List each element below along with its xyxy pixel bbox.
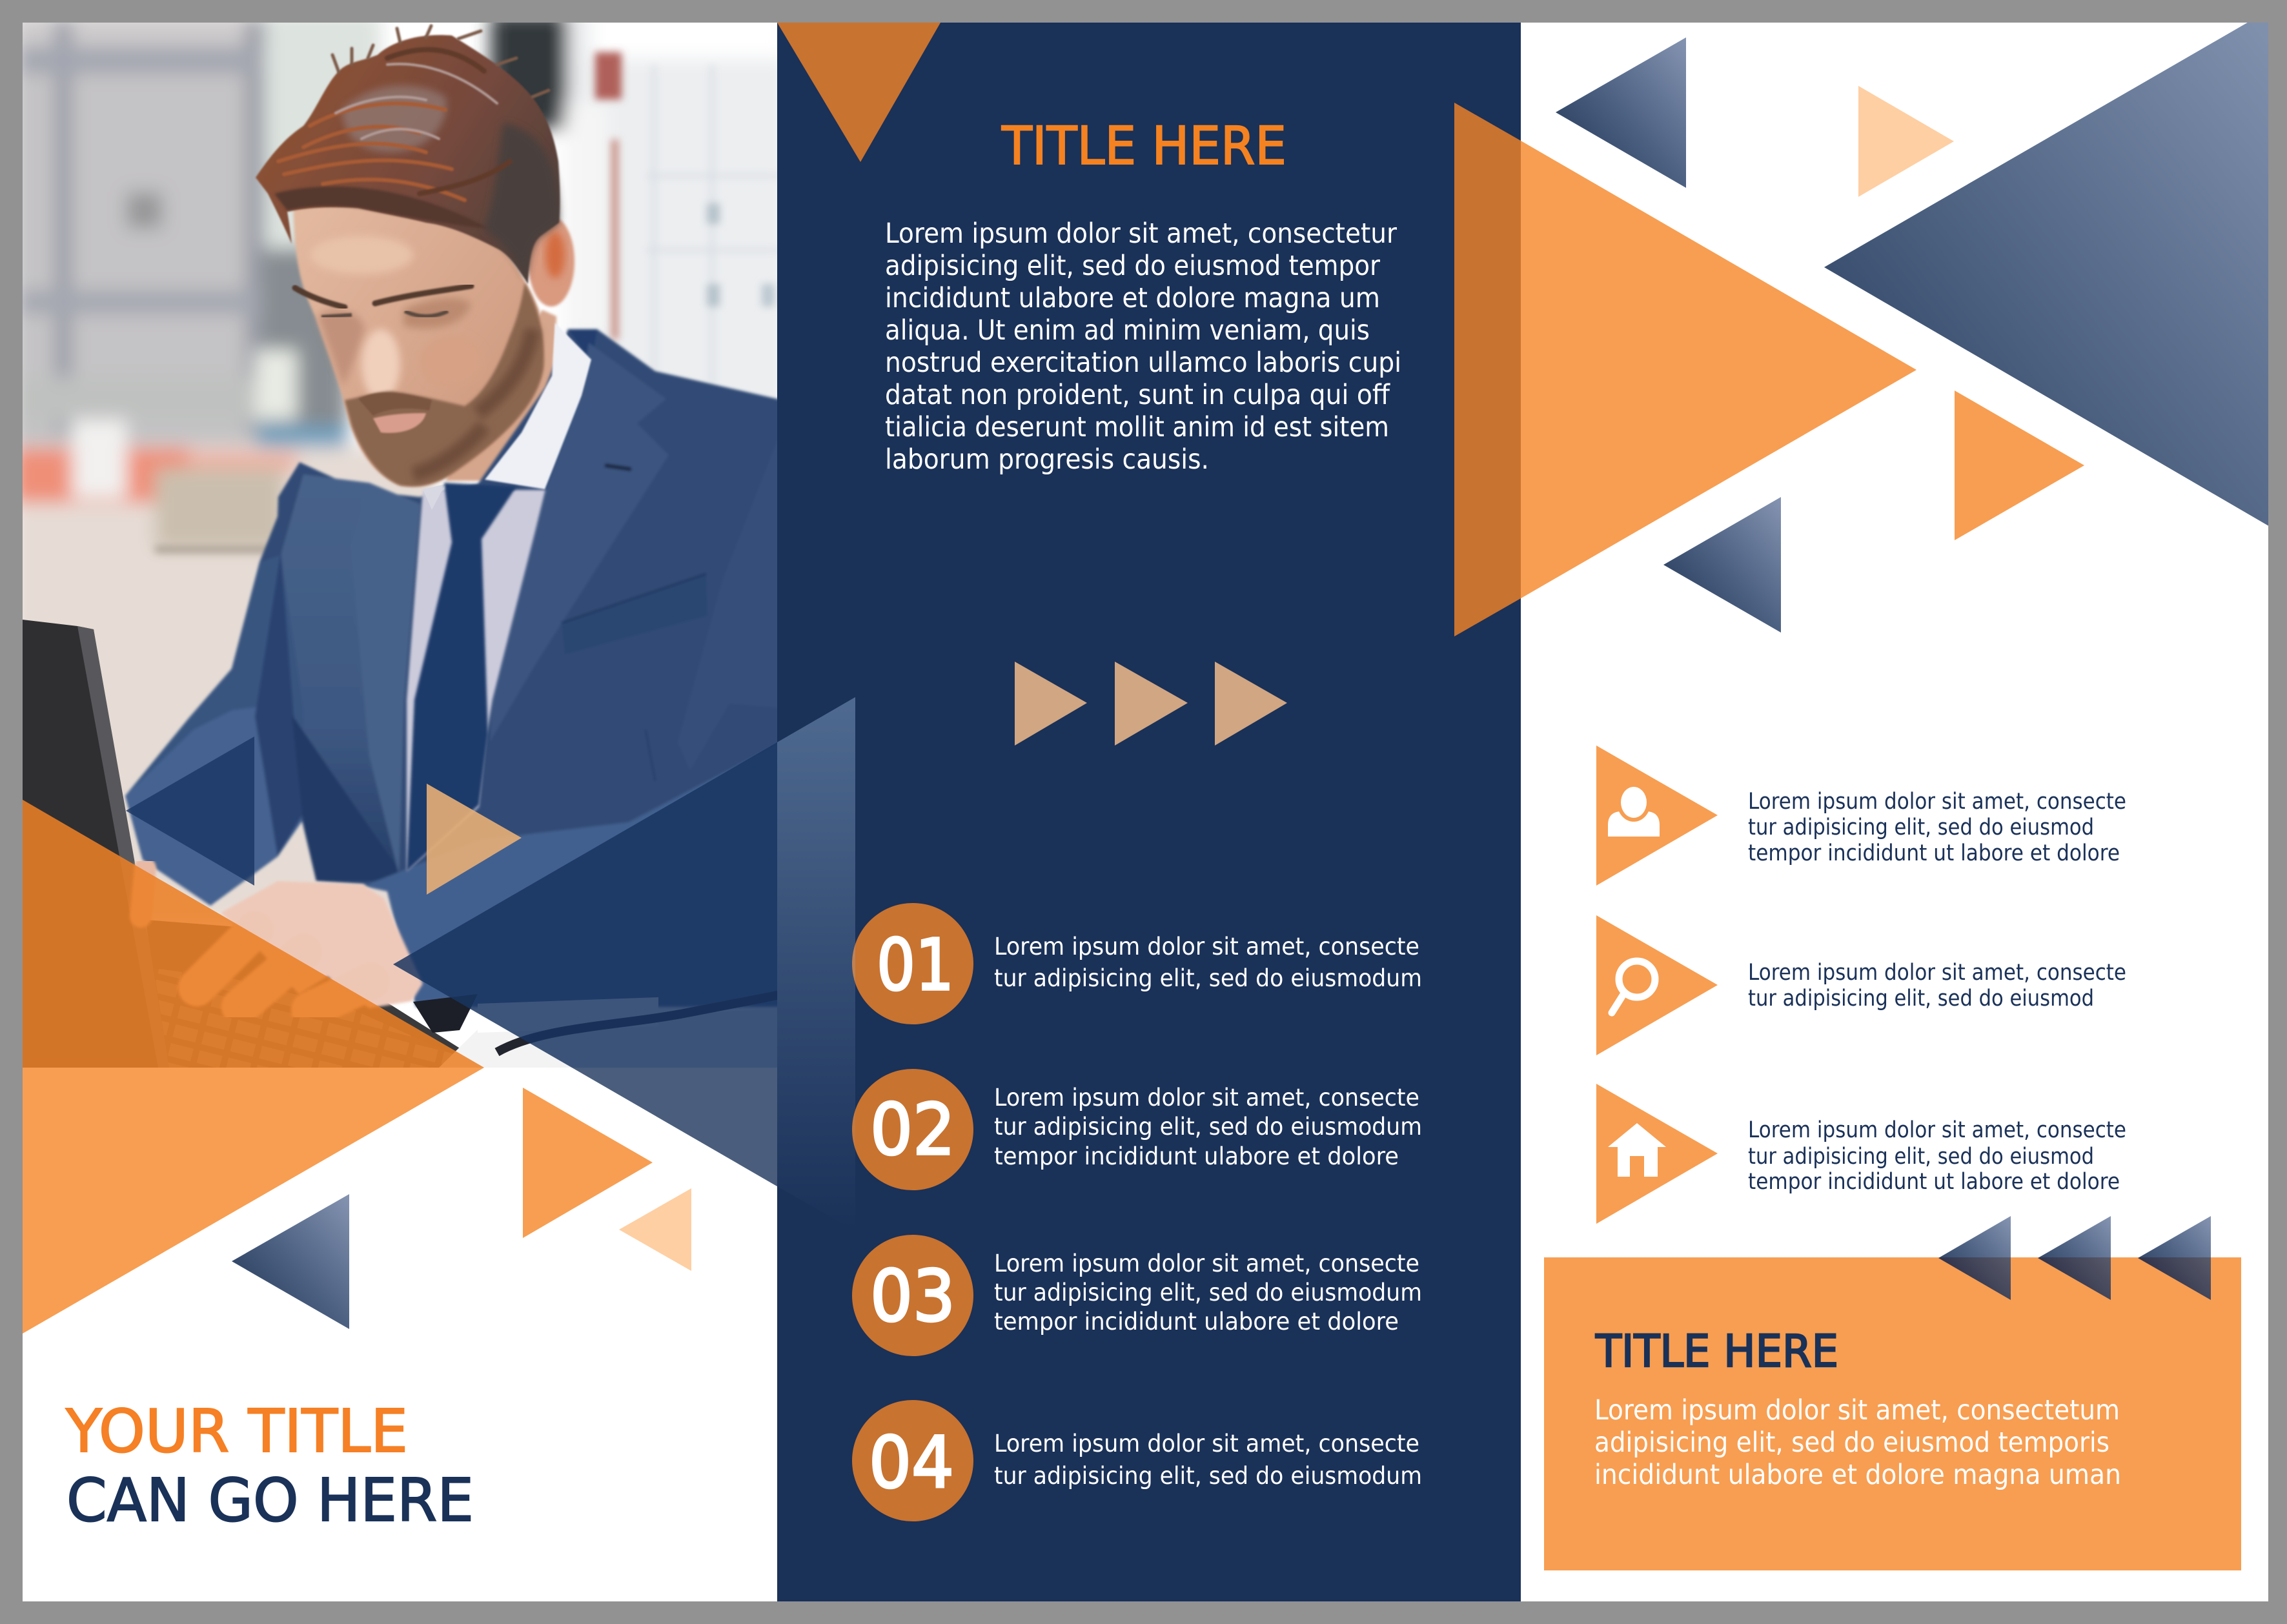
numbered item 02: tur adipisicing elit, sed do eiusmodum [994, 1113, 1422, 1141]
intro paragraph: tialicia deserunt mollit anim id est sitem [885, 411, 1389, 443]
panel: left cover [13, 13, 807, 1535]
callout heading: TITLE HERE [1595, 1326, 1838, 1377]
numbered item 03: tur adipisicing elit, sed do eiusmodum [994, 1279, 1422, 1306]
callout paragraph: incididunt ulabore et dolore magna uman [1594, 1459, 2121, 1491]
callout: orange box [1544, 1257, 2241, 1570]
photo overlay triangle: small navy [126, 736, 254, 886]
hair [256, 35, 560, 284]
panel: right column [1454, 0, 2287, 1570]
cover title: CAN GO HERE [66, 1466, 474, 1535]
outer grey border mask on the right [2268, 0, 2287, 1624]
feature row: search: tur adipisicing elit, sed do eiusmod [1748, 986, 2094, 1011]
numbered item 03: Lorem ipsum dolor sit amet, consecte [994, 1250, 1419, 1277]
feature row: home [1596, 1084, 2126, 1224]
steel triangle upper left [1556, 37, 1686, 188]
laptop [23, 620, 491, 1068]
numbered item 03: tempor incididunt ulabore et dolore [994, 1308, 1399, 1335]
numbered item 02 [852, 1069, 1422, 1190]
small orange triangle [1955, 391, 2084, 540]
cover title [65, 1397, 474, 1535]
numbered item 02: tempor incididunt ulabore et dolore [994, 1142, 1399, 1170]
neck [445, 310, 556, 481]
icon: magnifier [1612, 961, 1655, 1013]
numbered item 01 [852, 903, 1422, 1024]
intro paragraph [885, 218, 1401, 476]
numbered item 04: tur adipisicing elit, sed do eiusmodum [994, 1462, 1422, 1490]
large steel triangle [1824, 23, 2268, 525]
middle heading: TITLE HERE [1001, 116, 1286, 177]
callout paragraph: Lorem ipsum dolor sit amet, consectetum [1594, 1394, 2120, 1426]
translucent triangle edge over navy column [777, 697, 855, 1231]
numbered item 04: 04 [869, 1421, 954, 1504]
steel triangle lower [1663, 497, 1781, 633]
peach triangle [1858, 86, 1954, 197]
photo: businessman working at a laptop [13, 13, 807, 1068]
feature row: home: tempor incididunt ut labore et dolore [1748, 1169, 2120, 1195]
navy triangle below photo [572, 1068, 777, 1186]
icon: person [1608, 783, 1660, 837]
intro paragraph: Lorem ipsum dolor sit amet, consectetur [885, 218, 1397, 250]
numbered item 02: 02 [870, 1088, 955, 1171]
numbered item 04 [852, 1400, 1422, 1521]
numbered item 03 [852, 1235, 1422, 1356]
large orange triangle on white [1521, 141, 1916, 598]
steel triangle [232, 1194, 349, 1329]
shirt [407, 490, 545, 871]
beard [345, 283, 544, 487]
suit jacket [125, 329, 807, 1007]
feature row: person: tempor incididunt ut labore et dolore [1748, 840, 2120, 866]
navy background [777, 23, 1521, 1601]
intro paragraph: aliqua. Ut enim ad minim veniam, quis [885, 314, 1370, 347]
feature row: search [1596, 915, 2126, 1055]
intro paragraph: incididunt ulabore et dolore magna um [885, 282, 1380, 314]
feature row: search: Lorem ipsum dolor sit amet, consecte [1748, 960, 2126, 986]
numbered item 04: Lorem ipsum dolor sit amet, consecte [994, 1430, 1419, 1457]
numbered item 01: 01 [877, 924, 954, 1006]
tan arrow triangles [1015, 662, 1287, 746]
numbered item 01: Lorem ipsum dolor sit amet, consecte [994, 933, 1419, 960]
callout paragraph [1594, 1394, 2121, 1491]
feature row: person: tur adipisicing elit, sed do eiusmod [1748, 815, 2094, 840]
photo overlay triangle: tan [427, 784, 522, 895]
necktie [407, 483, 516, 871]
panel: middle navy column [777, 23, 1521, 1601]
peach triangle [619, 1188, 691, 1271]
top orange triangle [777, 23, 940, 162]
intro paragraph: nostrud exercitation ullamco laboris cupi [885, 347, 1401, 379]
numbered item 01: tur adipisicing elit, sed do eiusmodum [994, 964, 1422, 992]
icon: house [1608, 1123, 1666, 1177]
intro paragraph: adipisicing elit, sed do eiusmod tempor [885, 250, 1380, 282]
collar [485, 323, 591, 489]
feature row: person: Lorem ipsum dolor sit amet, consecte [1748, 789, 2126, 815]
eyebrows and eyes [295, 286, 471, 307]
feature row: home: tur adipisicing elit, sed do eiusmod [1748, 1144, 2094, 1170]
feature row: person [1596, 746, 2126, 886]
large orange triangle over navy [1454, 103, 1521, 636]
hand on keyboard [141, 868, 423, 1010]
feature row: home: Lorem ipsum dolor sit amet, consecte [1748, 1117, 2126, 1143]
head [256, 26, 574, 487]
numbered item 03: 03 [870, 1255, 955, 1337]
intro paragraph: datat non proident, sunt in culpa qui off [885, 379, 1390, 411]
large orange triangle [23, 1068, 484, 1334]
photo overlay triangle: large navy [393, 742, 777, 1068]
numbered item 02: Lorem ipsum dolor sit amet, consecte [994, 1084, 1419, 1111]
orange triangle [523, 1088, 653, 1238]
callout paragraph: adipisicing elit, sed do eiusmod temporis [1594, 1426, 2109, 1459]
table, papers and glasses [413, 991, 807, 1068]
intro paragraph: laborum progresis causis. [885, 443, 1209, 476]
cover title: YOUR TITLE [65, 1397, 408, 1466]
photo overlay triangle: orange [23, 800, 484, 1068]
triple steel arrows on callout [1938, 1216, 2211, 1300]
